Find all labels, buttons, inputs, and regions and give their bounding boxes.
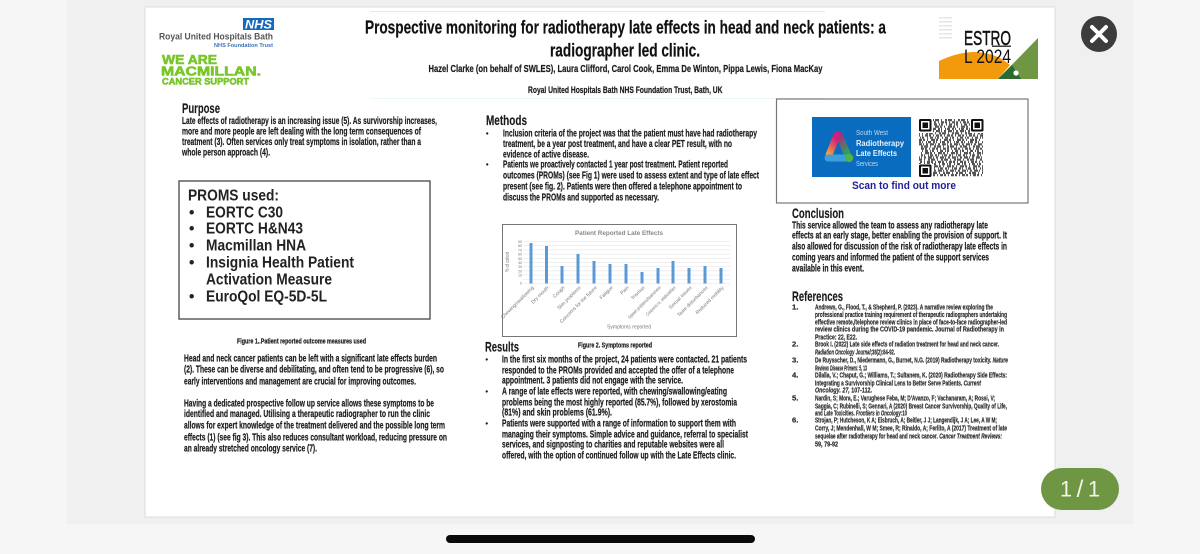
category labels: Concerns re. relationships (645, 285, 678, 318)
category labels: Taste disturbances (676, 285, 710, 318)
logo: We Are Macmillan (161, 52, 261, 88)
reference list: 2. (792, 340, 798, 348)
icon: close button (1081, 16, 1117, 52)
text block: purpose: Late effects of radiotherapy is an increasing issue (5). As survivorship increases, (182, 115, 437, 127)
panel: PROMS used: EuroQol EQ-5D-5L (206, 288, 327, 306)
text block: results: (81%) and skin problems (61.9%). (502, 406, 612, 418)
heading: purpose: Purpose (182, 100, 220, 116)
logo: We Are Macmillan: WE ARE (162, 52, 217, 67)
y axis ticks: 40 (518, 261, 522, 265)
reference list: effective remote,/telephone review clinics in place of face-to-face radiographer-led (815, 318, 1007, 326)
logo: Royal United Hospitals Bath NHS: NHS Foundation Trust (214, 43, 273, 49)
text block: results: • (486, 389, 488, 396)
text block: methods: Patients we proactively contacted 1 year post treatment. Patient reported (503, 158, 728, 170)
reference list: De Ruysscher, D., Niedermann, G., Burnet, N.G. (2019) Radiotherapy toxicity. Nature (815, 356, 1008, 364)
text block: late effects burden (184, 352, 444, 388)
logo: Royal United Hospitals Bath NHS: NHS (245, 20, 272, 32)
reference list: 3. (792, 356, 798, 364)
text block: conclusion: This service allowed the team to assess any radiotherapy late (792, 220, 988, 232)
text block: methods: discuss the PROMs and supported as necessary. (503, 192, 659, 204)
text block: results: A range of late effects were reported, with chewing/swallowing/eating (502, 386, 727, 398)
category labels (500, 285, 726, 325)
text block: conclusion (792, 220, 1007, 274)
panel: conclusion (792, 205, 1007, 274)
logo: South West Radiotherapy Late Effects Services: South West (856, 130, 888, 137)
reference list: Practice: 22, E22. (815, 332, 857, 342)
title: Prospective monitoring for radiotherapy late effects in head and neck patients: a (365, 16, 887, 38)
text block: methods: present (see fig. 2). Patients were then offered a telephone appointment to (503, 180, 742, 192)
text block: dedicated follow up: an already stretched oncology service (7). (184, 442, 317, 454)
title (365, 16, 887, 60)
reference list: Corry, J; Mendenhall, W M; Smee, R; Rinaldo, A; Ferlito, A (2017) Treatment of late (815, 424, 1007, 432)
title: radiographer led clinic. (550, 40, 700, 60)
caption: figure 2: Figure 2. Symptoms reported (578, 342, 652, 350)
logo: South West Radiotherapy Late Effects Services (812, 117, 911, 177)
text block: methods: outcomes (PROMs) (see Fig 1) were used to assess extent and type of late effect (503, 170, 759, 182)
text block: dedicated follow up: Having a dedicated prospective follow up service allows these symptoms to be (184, 398, 434, 410)
reference list: Reviews Disease Primers: 5, 13 (815, 364, 867, 372)
reference list: and Late Toxicities. Frontiers in Oncology:10 (815, 408, 907, 418)
text block: results: • (486, 421, 488, 428)
panel: PROMS used: Insignia Health Patient (206, 254, 354, 272)
page counter badge: 1 (1060, 476, 1072, 502)
reference list: Nardin, S; Mora, E.; Varughese Feba, M; D'Avanzo, F; Vachanaram, A; Rossi, V; (815, 394, 995, 402)
text block: dedicated follow up (184, 398, 447, 454)
text block: dedicated follow up: effects (1) (see fig 3). This also reduces consultant workload, reducing pressure on (184, 432, 447, 444)
logo: South West Radiotherapy Late Effects Services: Services (856, 161, 878, 168)
text block: methods: treatment, be a year post treatment, and have a clear PET result, with no (503, 138, 732, 150)
text block: purpose (181, 115, 437, 158)
reference list: Dilalla, V.; Chaput, G.; Williams, T.; Sultanem, K. (2020) Radiotherapy Side Effects: (815, 370, 1007, 380)
y axis ticks: 30 (518, 265, 522, 269)
text block: conclusion: coming years and informed the patient of the support services (792, 252, 989, 264)
bar chart: patient reported late effects: Patient Reported Late Effects (575, 230, 663, 237)
category labels: Speech problems/hoarseness (627, 285, 663, 321)
reference list: Radiation Oncology Journal;38(2):84-92. (815, 348, 895, 356)
logo: South West Radiotherapy Late Effects Services: Late Effects (856, 149, 897, 158)
panel: PROMS used: • (189, 238, 194, 254)
panel: references (792, 288, 1008, 448)
panel: PROMS used: Activation Measure (206, 272, 332, 288)
logo: ESTRO 2024 (939, 17, 1038, 79)
y axis ticks: 90 (518, 240, 522, 244)
panel: PROMS used: • (189, 288, 194, 306)
text block: results: problems being the most highly reported (85.7%), followed by xerostomia (502, 396, 737, 408)
poster content (159, 11, 1038, 462)
authors: Hazel Clarke (on behalf of SWLES), Laura Clifford, Carol Cook, Emma De Winton, Pippa Lewis, Fiona MacKay (428, 63, 823, 75)
category labels: Reduced mobility (695, 285, 726, 316)
page counter badge: 1 (1088, 476, 1100, 502)
text block: conclusion: effects at an early stage, better enabling the provision of support. It (792, 230, 1007, 242)
y axis label: % of cohort (505, 252, 511, 272)
y axis ticks: 60 (518, 253, 522, 257)
category labels: Cough (552, 285, 567, 300)
y axis ticks: 0 (520, 282, 522, 286)
panel: PROMS used: PROMS used: (188, 188, 279, 204)
y axis ticks: 70 (518, 248, 522, 252)
reference list: 59, 79-92 (815, 440, 838, 448)
panel: PROMS used: • (189, 204, 194, 222)
text block: results: managing their symptoms. Simple advice and guidance, referral to specialist (502, 428, 748, 440)
text block: dedicated follow up: allows for expert knowledge of the treatment delivered and the possible long term (184, 420, 445, 432)
reference list: sequelae after radiotherapy for head and neck cancer. Cancer Treatment Reviews: (815, 432, 1002, 440)
y axis ticks: 20 (518, 269, 522, 273)
poster sheet (145, 7, 1055, 517)
y axis ticks: 80 (518, 244, 522, 248)
category labels: Trismus (630, 285, 647, 302)
panel: purpose (181, 100, 437, 158)
panel: PROMS used: Macmillan HNA (206, 238, 306, 254)
text block: results: In the first six months of the project, 24 patients were contacted. 21 patients (502, 354, 747, 366)
page counter badge (1041, 468, 1119, 510)
logo: Royal United Hospitals Bath NHS (159, 18, 274, 49)
reference list: 5. (792, 394, 798, 402)
logo: ESTRO 2024: L 2024 (964, 47, 1011, 68)
text block: methods: evidence of active disease. (503, 148, 589, 160)
panel: PROMS used (179, 181, 430, 319)
text block: dedicated follow up: identified and managed. Utilising a therapeutic radiographer to run the clinic (184, 408, 430, 420)
text block: results: offered, with the option of continued follow up with the Late Effects clinic. (502, 450, 736, 462)
category labels: Pain (619, 285, 631, 296)
reference list: Andrews, G., Flood, T., & Shepherd, P. (2023). A narrative review exploring the (815, 302, 993, 312)
reference list: Brook I. (2022) Late side effects of radiation treatment for head and neck cancer. (815, 340, 999, 348)
text block: results: Patients were supported with a range of information to support them with (502, 418, 736, 430)
reference list: professional practice training requirement of therapeutic radiographers undertaking (815, 310, 1007, 319)
link text: Scan to find out more (852, 180, 956, 192)
panel: results (485, 338, 748, 462)
category labels: Dry mouth (530, 285, 551, 305)
text block: results: responded to the PROMs provided and accepted the offer of a telephone (502, 364, 734, 376)
panel: methods (486, 112, 759, 204)
text block: conclusion: also allowed for discussion of the risk of radiotherapy late effects in (792, 240, 1007, 252)
text block: late effects burden: Head and neck cancer patients can be left with a significant late effects burden (184, 352, 437, 364)
reference list: Saggia, C; Rubinelli, S; Gennari, A (2020) Breast Cancer Survivorship, Quality of Life, (815, 402, 1007, 410)
y axis ticks (518, 240, 522, 286)
y axis ticks: 10 (518, 274, 522, 278)
text block: purpose: more and more people are left dealing with the long term consequences of (182, 126, 421, 138)
text block: methods (486, 128, 759, 204)
home indicator bar (446, 535, 755, 543)
text block: late effects burden: (2). These can be diverse and debilitating, and often tend to be progressive (6), so (184, 364, 444, 376)
reference list: Strojan, P; Hutcheson, K A; Eisbruch, A; Beitler, J J; Langendijk, J A; Lee, A W M; (815, 416, 997, 424)
bars (530, 243, 722, 284)
text block: results: appointment. 3 patients did not engage with the service. (502, 374, 683, 386)
text block: purpose: whole person approach (4). (181, 146, 270, 158)
heading: conclusion: Conclusion (792, 205, 844, 221)
y axis ticks: 50 (518, 257, 522, 261)
reference list (792, 302, 1008, 448)
text block: results: • (486, 357, 488, 364)
logo: We Are Macmillan: MACMILLAN. (161, 64, 261, 78)
caption: figure 1: Figure 1..Patient reported outcome measures used (237, 338, 366, 346)
affiliation: Royal United Hospitals Bath NHS Foundation Trust, Bath, UK (528, 85, 723, 95)
logo: ESTRO 2024: ESTRO (964, 28, 1011, 50)
category labels: Chewing/swallowing (500, 285, 536, 321)
category labels: Concerns for the future (559, 285, 599, 325)
logo: South West Radiotherapy Late Effects Services: Radiotherapy (856, 139, 905, 148)
x axis label: Symptoms reported (607, 324, 651, 330)
category labels: Sexual issues (668, 285, 694, 311)
text block: conclusion: available in this event. (792, 262, 864, 274)
reference list: Integrating a Survivorship Clinical Lens to Better Serve Patients. Current (815, 378, 981, 388)
panel: scan to find out more (776, 99, 1028, 203)
text block: results (486, 354, 748, 462)
category labels: Skin problems (556, 285, 583, 311)
reference list: review clinics during the COVID-19 pandemic. Journal of Radiotherapy in (815, 324, 1004, 334)
text block: methods: • (486, 162, 489, 169)
text block: results: services, and signposting to charities and reputable websites were all (502, 438, 724, 450)
logo: We Are Macmillan: CANCER SUPPORT (162, 76, 249, 88)
icon: QR code (918, 118, 985, 178)
panel: PROMS used: • (189, 254, 194, 272)
reference list: 1. (792, 302, 798, 312)
category labels: Fatigue (599, 285, 615, 301)
text block: methods: • (486, 131, 489, 138)
page counter badge: / (1077, 476, 1084, 503)
heading: results: Results (485, 338, 519, 354)
text block: methods: Inclusion criteria of the project was that the patient must have had radiotherapy (503, 128, 757, 140)
reference list: Oncology. 27, 107-112. (815, 386, 872, 394)
panel: PROMS used: EORTC H&N43 (206, 220, 303, 238)
text block: late effects burden: early interventions and management are crucial for improving outcomes. (184, 376, 416, 388)
reference list: 4. (792, 370, 798, 380)
heading: methods: Methods (486, 112, 527, 128)
logo: Royal United Hospitals Bath NHS: Royal United Hospitals Bath (159, 32, 273, 42)
text block: purpose: treatment (3). Often services only treat symptoms in isolation, rather than a (182, 136, 421, 148)
panel: PROMS used: • (189, 220, 194, 238)
heading: references: References (792, 288, 843, 304)
reference list: 6. (792, 416, 798, 424)
panel: PROMS used: EORTC C30 (206, 204, 283, 222)
bar chart: patient reported late effects (500, 224, 736, 336)
